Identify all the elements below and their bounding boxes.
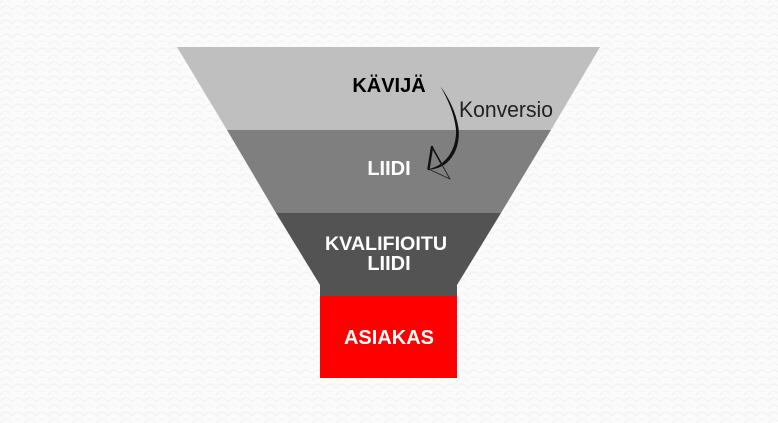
funnel tier: KVALIFIOITU LIIDI: KVALIFIOITU [325, 233, 447, 255]
funnel tier: ASIAKAS [320, 296, 457, 378]
funnel tier: LIIDI: LIIDI [367, 158, 411, 180]
label: Konversio: Konversio [459, 97, 553, 122]
funnel tier: KÄVIJÄ [177, 47, 600, 130]
arrow: conversion [428, 86, 459, 179]
funnel tier: ASIAKAS: ASIAKAS [344, 327, 434, 349]
funnel tier: KÄVIJÄ: KÄVIJÄ [352, 74, 426, 97]
funnel tier: KVALIFIOITU LIIDI: LIIDI [367, 253, 411, 275]
funnel tier: KVALIFIOITU LIIDI [276, 213, 501, 296]
funnel tier: LIIDI [227, 130, 551, 213]
